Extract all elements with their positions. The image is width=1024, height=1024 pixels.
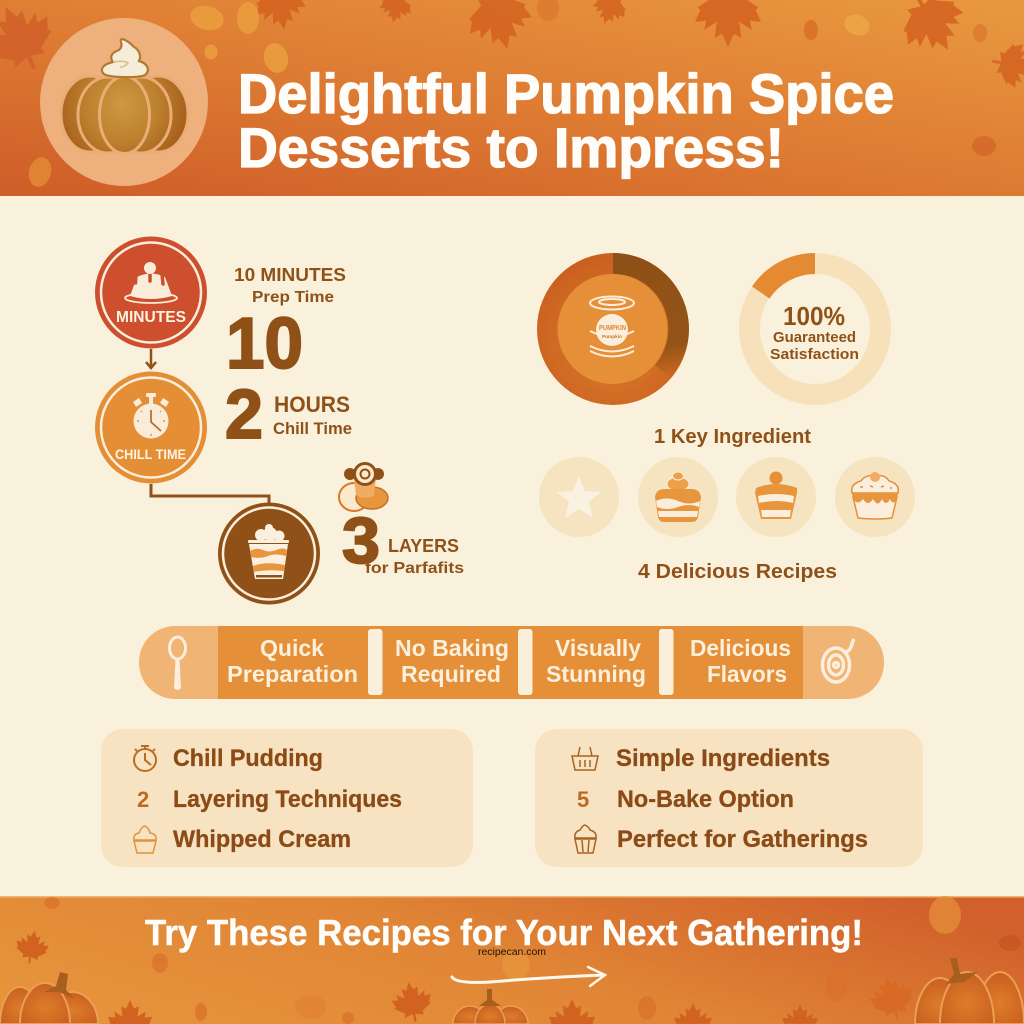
- footer banner: [0, 896, 1024, 1024]
- ribbon labels: Required: [401, 661, 501, 687]
- donut: 100 percent guaranteed satisfaction: Guaranteed: [773, 329, 856, 346]
- ribbon labels: Stunning: [546, 661, 646, 687]
- icon: cupcake: [835, 457, 915, 537]
- panel: left checklist: [101, 729, 473, 867]
- title: Delightful Pumpkin Spice: [238, 62, 894, 125]
- icon: small parfait on saucers: [339, 464, 388, 511]
- call to action: Try These Recipes for Your Next Gathering!: [145, 912, 863, 953]
- footer maple leaves: [13, 928, 919, 1024]
- left list labels: Chill Pudding: [173, 745, 323, 772]
- icon: layer cake: [638, 457, 718, 537]
- icon: basket: [572, 747, 598, 770]
- icon: pumpkin can: [590, 296, 634, 356]
- step 1: prep time badge: [95, 236, 207, 348]
- watermark: recipecan.com: recipecan.com: [478, 947, 546, 958]
- icon: whipped cream cup: [134, 826, 156, 853]
- title: Desserts to Impress!: [238, 116, 784, 179]
- panel: right checklist: [535, 729, 923, 867]
- right list labels: Simple Ingredients: [616, 745, 830, 772]
- stat: 2 hours chill time: 2: [225, 375, 263, 453]
- icon: pumpkin with whipped cream: [40, 18, 208, 186]
- footer pumpkin: middle: [453, 989, 528, 1024]
- item number: 5: 5: [577, 787, 589, 812]
- stat: 3 layers for parfaits: LAYERS: [388, 536, 459, 556]
- arrow: hand-drawn white: [452, 967, 605, 986]
- icon: parfait cup: [736, 457, 816, 537]
- donut: key ingredient can: [537, 253, 689, 405]
- icon: cinnamon swirl: [822, 639, 854, 682]
- icon: pumpkin can: Pumpkin: [602, 334, 622, 339]
- icon: stopwatch: [134, 746, 156, 771]
- ribbon labels: Visually: [555, 635, 641, 661]
- right list labels: No-Bake Option: [617, 786, 794, 813]
- benefits ribbon: [139, 626, 884, 699]
- step 2: chill time badge: CHILL TIME: [115, 446, 186, 462]
- header falling leaves: [0, 0, 1024, 156]
- stat: 10 minutes prep time: [226, 265, 346, 384]
- step 3: parfait badge: [218, 502, 320, 604]
- left list labels: [173, 745, 402, 853]
- step 2: chill time badge: [95, 372, 207, 484]
- ribbon labels: [227, 635, 791, 687]
- ribbon labels: Delicious: [690, 635, 791, 661]
- ribbon labels: Flavors: [707, 661, 787, 687]
- stat: 3 layers for parfaits: [342, 504, 464, 577]
- stat: 10 minutes prep time: Prep Time: [252, 289, 334, 306]
- stat: 2 hours chill time: [225, 375, 352, 453]
- icon: cupcake outline: [575, 825, 596, 853]
- donut: 100 percent guaranteed satisfaction: [750, 253, 880, 394]
- left list labels: Whipped Cream: [173, 826, 351, 853]
- header banner: [0, 0, 1024, 196]
- left list labels: Layering Techniques: [173, 786, 402, 813]
- right list labels: [616, 745, 868, 853]
- footer pumpkin: right: [915, 958, 1024, 1024]
- title: [238, 62, 894, 179]
- label: 4 delicious recipes: 4 Delicious Recipes: [638, 561, 837, 583]
- stat: 2 hours chill time: Chill Time: [273, 419, 352, 438]
- footer pumpkin: left: [0, 972, 98, 1024]
- ribbon labels: Preparation: [227, 661, 358, 687]
- stat: 3 layers for parfaits: for Parfafits: [365, 560, 464, 577]
- header pale leaves: [25, 2, 873, 189]
- stat: 10 minutes prep time: 10: [226, 304, 303, 384]
- ribbon labels: Quick: [260, 635, 324, 661]
- stat: 3 layers for parfaits: 3: [342, 504, 380, 577]
- donut: 100 percent guaranteed satisfaction: Satisfaction: [770, 346, 859, 363]
- connector: step 2 to step 3: [151, 484, 269, 504]
- arrow: step 1 to step 2: [146, 349, 156, 368]
- stat: 2 hours chill time: HOURS: [274, 392, 350, 417]
- item number: 2: 2: [137, 787, 149, 812]
- right list labels: Perfect for Gatherings: [617, 826, 868, 853]
- footer leaf spots: [44, 896, 1021, 1024]
- icon: spoon: [170, 637, 186, 690]
- icon: pumpkin can: PUMPKIN: [599, 325, 626, 332]
- stat: 10 minutes prep time: 10 MINUTES: [234, 265, 346, 285]
- step 1: prep time badge: MINUTES: [116, 309, 186, 326]
- icon: star: [539, 457, 619, 537]
- ribbon dividers: [368, 629, 674, 695]
- label: 1 key ingredient: 1 Key Ingredient: [654, 426, 811, 448]
- ribbon labels: No Baking: [395, 635, 509, 661]
- donut: 100 percent guaranteed satisfaction: 100%: [783, 301, 845, 331]
